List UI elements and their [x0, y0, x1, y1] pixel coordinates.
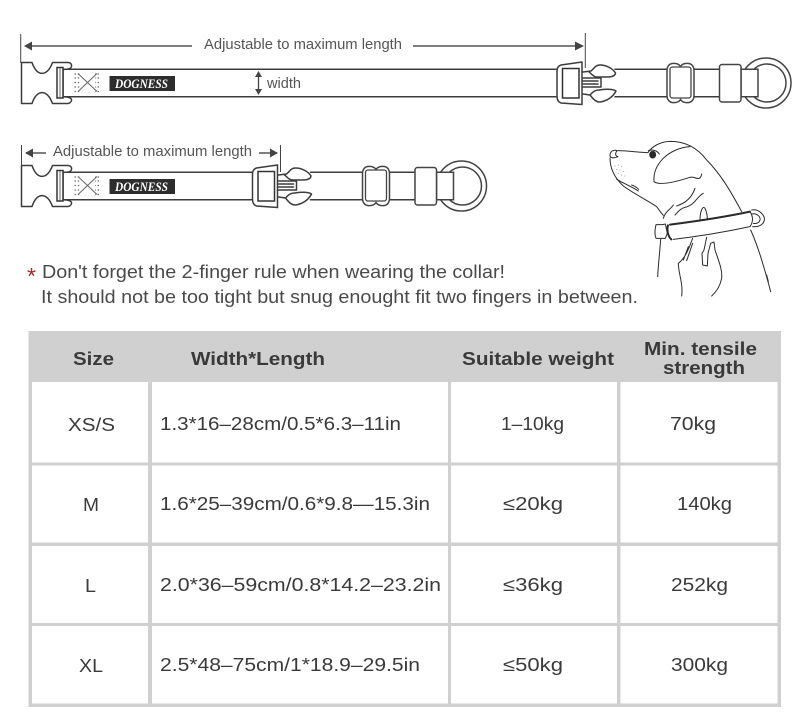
short length dimension arrow [22, 143, 280, 172]
row: L: ≤36kg [503, 574, 563, 595]
short length dimension arrow: Adjustable to maximum length [53, 143, 252, 160]
collar diagram: short [22, 143, 556, 211]
row: XS/S: 1–10kg [501, 413, 564, 434]
dog illustration wearing collar [610, 141, 771, 296]
brand label: DOGNESS [114, 77, 168, 91]
row: XL: ≤50kg [503, 654, 563, 675]
length dimension arrow [21, 33, 585, 68]
2-finger rule note: It should not be too tight but snug enought fit two fingers in between. [41, 286, 638, 307]
table header: Width*Length [191, 348, 325, 369]
width marker [255, 71, 301, 95]
row: M: M [83, 494, 99, 515]
size table [28, 331, 781, 707]
2-finger rule note [27, 261, 638, 307]
table header: Min. tensile [644, 338, 757, 359]
row: M: ≤20kg [503, 493, 563, 514]
dog collar strap [655, 210, 764, 239]
table header: strength [663, 357, 745, 378]
row: XL: 300kg [671, 654, 728, 675]
row: XS/S: 70kg [670, 413, 716, 434]
row: XS/S [68, 413, 716, 435]
row: M: 140kg [677, 493, 732, 514]
row: L: 252kg [671, 574, 728, 595]
row: XL [79, 654, 728, 676]
brand label: DOGNESS [114, 180, 168, 194]
row: XS/S: 1.3*16–28cm/0.5*6.3–11in [160, 413, 401, 434]
row: M [83, 493, 732, 515]
row: XL: 2.5*48–75cm/1*18.9–29.5in [160, 654, 420, 675]
table header: Size [73, 348, 114, 369]
row: XS/S: XS/S [68, 414, 115, 435]
row: L: L [85, 575, 96, 596]
table header [73, 338, 757, 378]
collar diagram: long [21, 33, 791, 108]
2-finger rule note: * [27, 263, 36, 289]
length dimension arrow: Adjustable to maximum length [204, 36, 402, 53]
row: XL: XL [79, 655, 103, 676]
table header: Suitable weight [462, 348, 614, 369]
row: M: 1.6*25–39cm/0.6*9.8—15.3in [160, 493, 430, 514]
table grid [28, 331, 781, 707]
width marker: width [266, 75, 301, 92]
row: L [85, 574, 728, 596]
2-finger rule note: Don't forget the 2-finger rule when wearing the collar! [42, 261, 505, 282]
row: L: 2.0*36–59cm/0.8*14.2–23.2in [160, 574, 441, 595]
